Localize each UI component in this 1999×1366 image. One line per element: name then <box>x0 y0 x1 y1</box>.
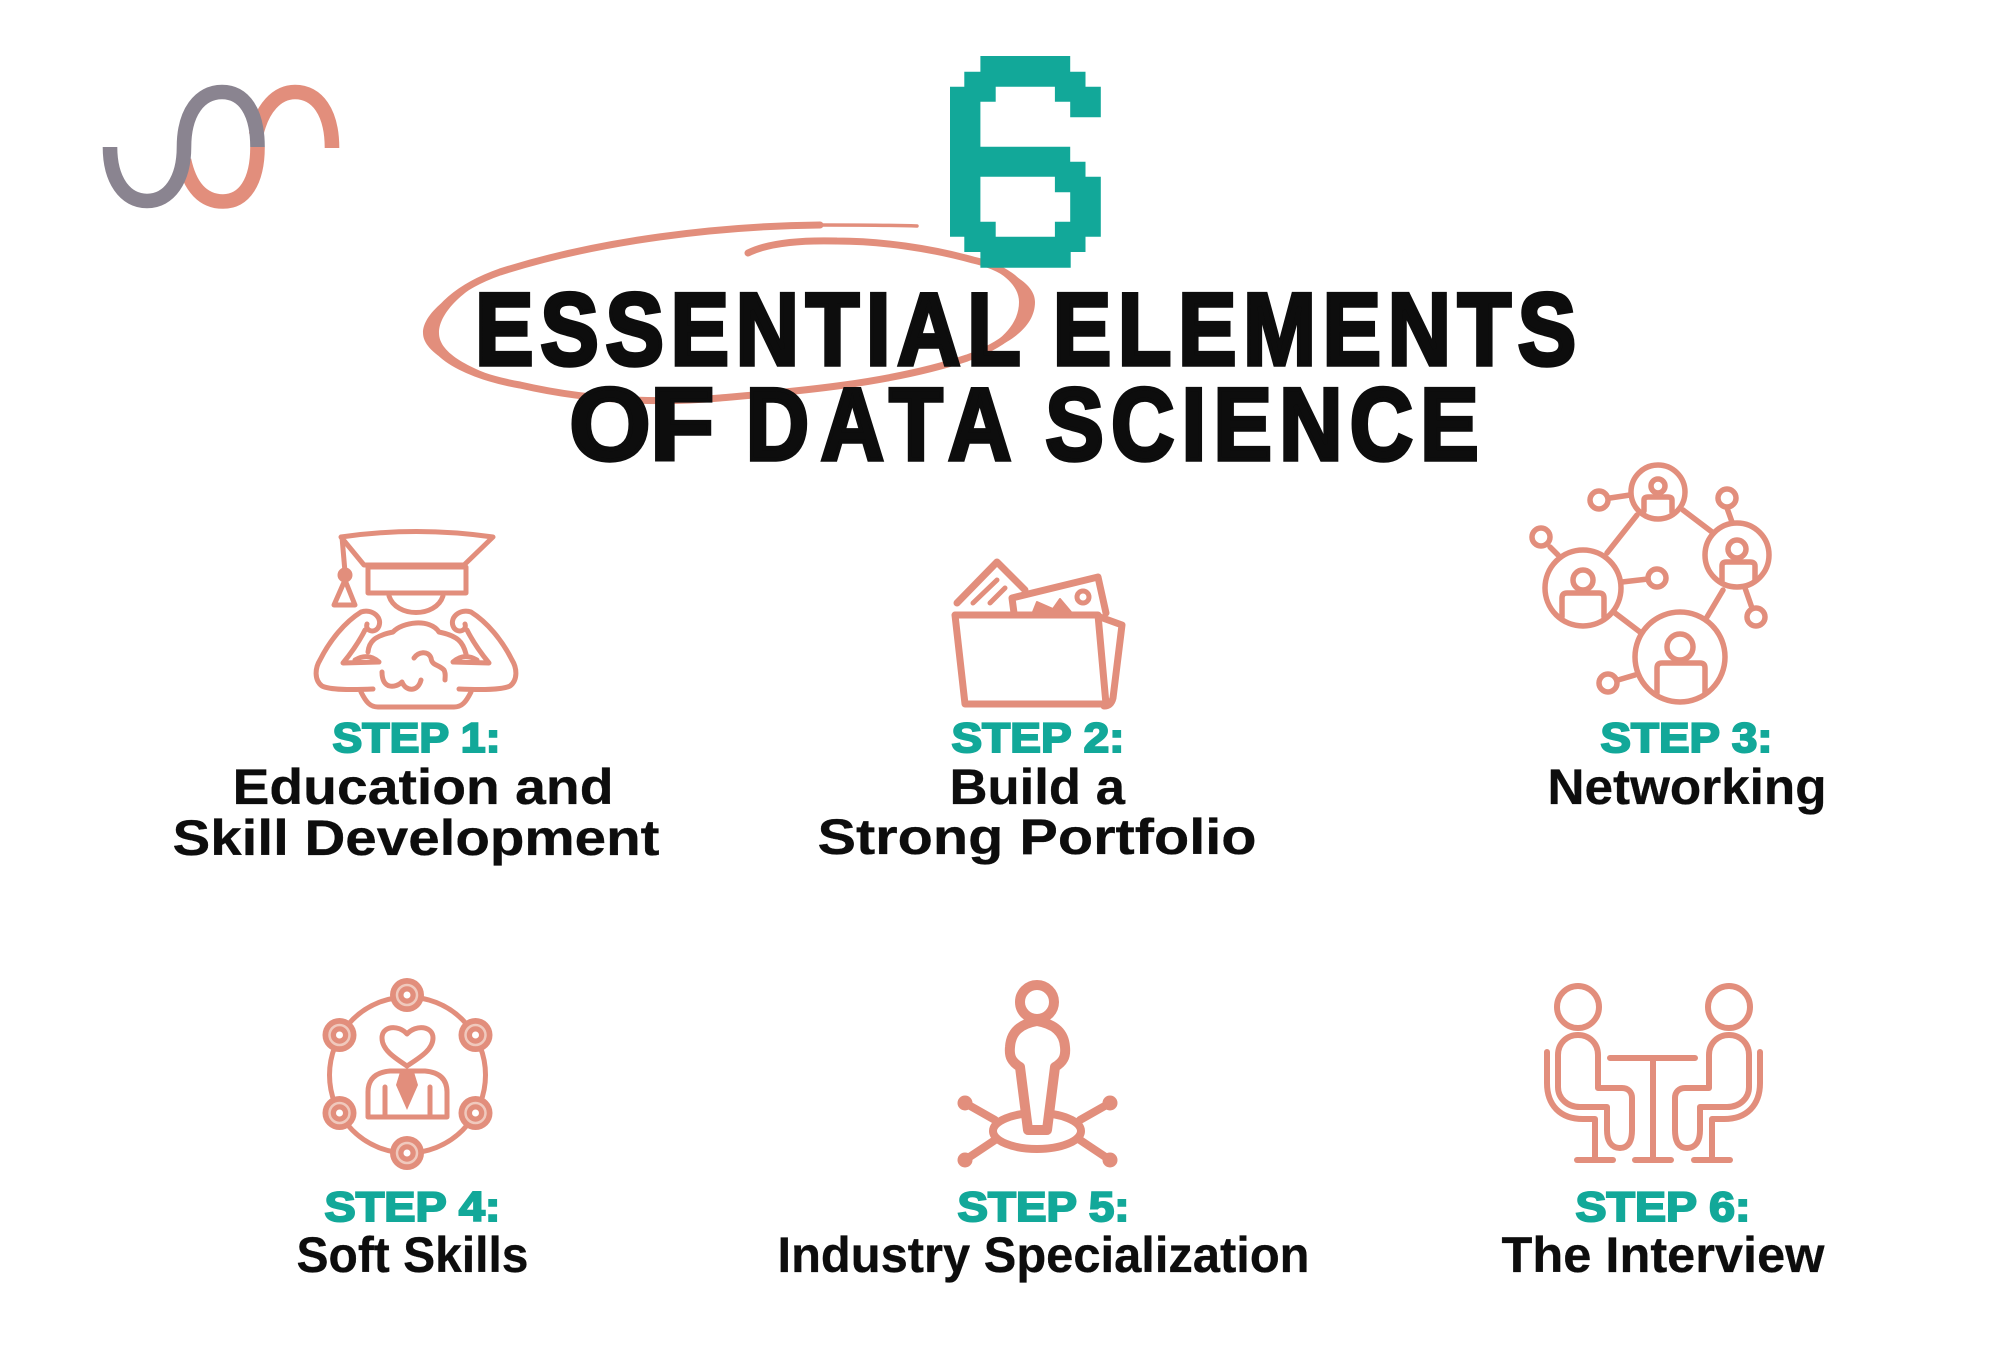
icon: people network <box>1532 465 1769 702</box>
panel: step 6: STEP 6: <box>1576 1183 1750 1230</box>
icon: person with heart and ring <box>322 978 492 1170</box>
title: SCIENCE <box>1046 368 1478 482</box>
title <box>475 273 1576 482</box>
big pixel number 6 <box>950 56 1101 268</box>
panel: step 2: Build a <box>950 759 1126 815</box>
panel: step 1: Education and <box>232 759 614 815</box>
panel: step 4 <box>296 978 528 1283</box>
title: OF <box>570 366 714 482</box>
panel: step 1: STEP 1: <box>332 714 500 761</box>
panel: step 6: The Interview <box>1502 1227 1825 1283</box>
icon: two people at a table <box>1547 986 1760 1160</box>
panel: step 3: STEP 3: <box>1600 714 1772 761</box>
panel: step 6 <box>1502 986 1825 1283</box>
icon: graduation cap and flexing brain <box>316 532 516 707</box>
title: ELEMENTS <box>1053 273 1576 387</box>
panel: step 5 <box>778 985 1310 1283</box>
title: DATA <box>746 368 1011 482</box>
logo <box>110 92 332 202</box>
icon: person on target spot <box>958 985 1118 1168</box>
panel: step 2: Strong Portfolio <box>818 809 1256 865</box>
panel: step 1: Skill Development <box>172 810 660 866</box>
panel: step 4: STEP 4: <box>324 1183 500 1230</box>
panel: step 2 <box>818 562 1256 865</box>
icon: portfolio folder <box>955 562 1122 706</box>
panel: step 2: STEP 2: <box>952 714 1124 761</box>
panel: step 4: Soft Skills <box>296 1227 528 1283</box>
hand-drawn circle around ESSENTIAL <box>423 225 1035 401</box>
panel: step 3: Networking <box>1548 759 1826 815</box>
panel: step 5: Industry Specialization <box>778 1227 1310 1283</box>
panel: step 3 <box>1532 465 1826 815</box>
title: ESSENTIAL <box>475 273 1021 387</box>
panel: step 1 <box>172 532 660 866</box>
panel: step 5: STEP 5: <box>958 1183 1130 1230</box>
